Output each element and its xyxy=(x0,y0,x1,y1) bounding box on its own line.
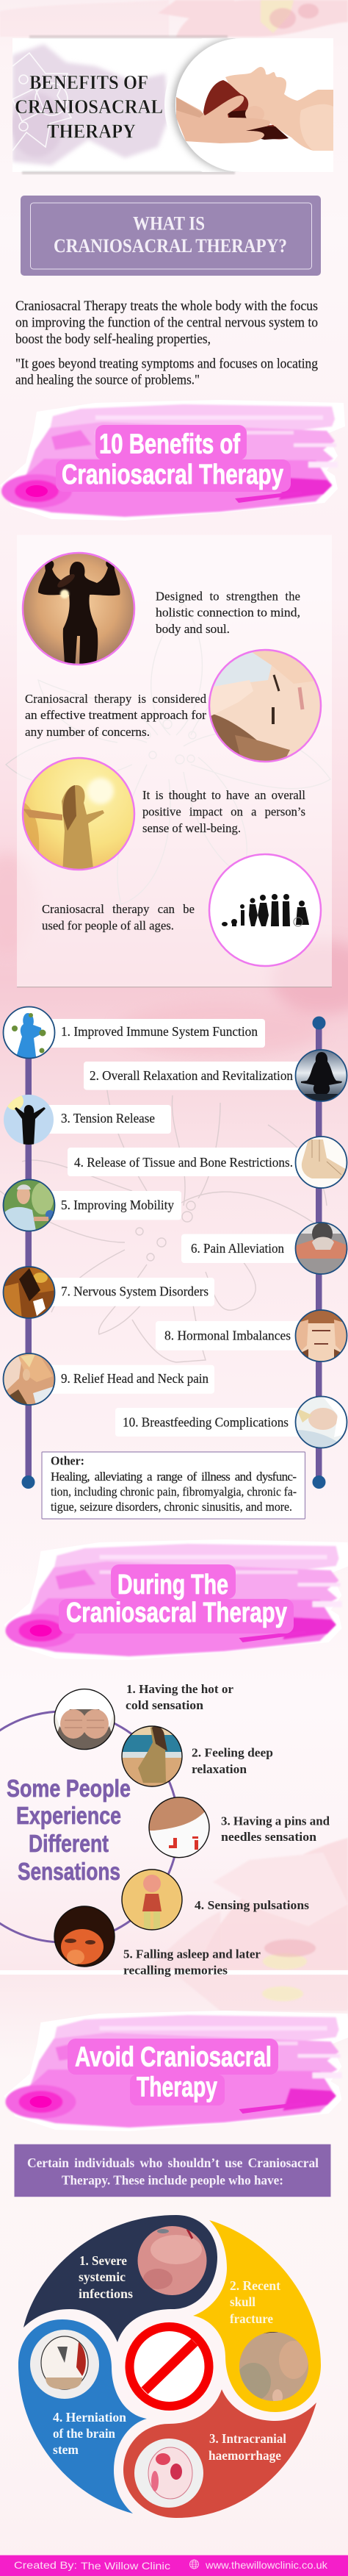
benefit 1: 1. Improved Immune System Function xyxy=(61,1024,258,1039)
header title: CRANIOSACRAL xyxy=(15,96,163,118)
flower outline behind panel xyxy=(6,603,330,904)
panel: benefits intro xyxy=(17,535,332,987)
benefit 4 xyxy=(68,1137,348,1188)
banner heading: Craniosacral Therapy xyxy=(66,1598,287,1628)
big sensations heading: Some People xyxy=(7,1775,131,1802)
banner heading: Avoid Craniosacral xyxy=(75,2042,272,2073)
sensation 1 label: 1. Having the hot or xyxy=(126,1682,233,1696)
footer xyxy=(0,2555,348,2576)
benefit 3 xyxy=(4,1092,171,1147)
icon: globe xyxy=(189,2560,198,2569)
text: effective treatment: an effective treatment approach for xyxy=(25,708,207,722)
what is heading: CRANIOSACRAL THERAPY? xyxy=(54,235,287,257)
benefit 1 xyxy=(3,1007,265,1062)
timeline lines xyxy=(22,1016,326,1489)
text: holistic xyxy=(156,589,300,636)
benefit 10: 10. Breastfeeding Complications xyxy=(123,1415,289,1430)
text: all ages: Craniosacral therapy can be xyxy=(42,902,195,916)
banner: avoid xyxy=(4,2011,348,2131)
benefit 2: 2. Overall Relaxation and Revitalization xyxy=(90,1068,293,1083)
photo: woman in sunlight xyxy=(23,758,134,875)
banner: during the therapy xyxy=(4,1539,348,1660)
sensation 5 label: recalling memories xyxy=(123,1964,228,1978)
benefit 9 xyxy=(3,1353,214,1408)
swirl: recent skull fracture: 2. Recent xyxy=(230,2278,280,2293)
sensation 2 label: relaxation xyxy=(192,1762,247,1776)
swirl: intracranial haemorrhage: haemorrhage xyxy=(209,2448,281,2463)
sensation 3 label: 3. Having a pins and xyxy=(221,1814,330,1828)
swirl: severe systemic infections: systemic xyxy=(79,2269,126,2284)
intro text: "It goes beyond treating symptoms and focuses on locating xyxy=(15,357,318,372)
sensation 1 xyxy=(54,1689,115,1750)
text: holistic: holistic connection to mind, xyxy=(156,606,300,620)
big sensations heading: Different xyxy=(29,1830,109,1857)
swirl: severe systemic infections: infections xyxy=(79,2286,133,2301)
intro text: Craniosacral Therapy treats the whole body with the focus xyxy=(15,299,318,314)
arc xyxy=(164,38,235,172)
other box: tion, including chronic pain, fibromyalgia, chronic fa- xyxy=(51,1484,297,1498)
text: effective treatment: any number of concerns. xyxy=(25,725,150,739)
sensation 5 xyxy=(54,1906,115,1967)
intro text: and healing the source of problems." xyxy=(15,373,200,388)
sensation 2 label xyxy=(192,1746,273,1776)
benefit 3: 3. Tension Release xyxy=(61,1111,155,1126)
sensation 4 label: 4. Sensing pulsations xyxy=(195,1898,310,1912)
swirl: intracranial haemorrhage: 3. Intracranial xyxy=(209,2431,286,2446)
intro text: boost the body self-healing properties, xyxy=(15,332,211,347)
swirl: severe systemic infections: 1. Severe xyxy=(79,2253,127,2268)
swirl: herniation of the brain stem xyxy=(18,2319,147,2514)
text: all ages: used for people of all ages. xyxy=(42,919,174,932)
benefit 6: 6. Pain Alleviation xyxy=(191,1241,284,1256)
banner heading xyxy=(66,1570,287,1628)
benefit 5: 5. Improving Mobility xyxy=(61,1198,174,1212)
swirl: severe systemic infections xyxy=(23,2215,217,2342)
text: effective treatment: Craniosacral therapy is considered xyxy=(25,692,207,706)
benefit 7 xyxy=(3,1267,214,1320)
photo: silhouette xyxy=(23,553,134,669)
banner heading xyxy=(75,2042,272,2103)
swirl: herniation of the brain stem: stem xyxy=(53,2442,79,2457)
swirl: recent skull fracture: skull xyxy=(230,2294,255,2309)
benefit 2 xyxy=(84,1050,348,1103)
intro text: on improving the function of the central nervous system to xyxy=(15,316,318,331)
sensation 4 xyxy=(122,1870,182,1930)
benefit 9: 9. Relief Head and Neck pain xyxy=(61,1371,209,1386)
swirl: herniation of the brain stem: 4. Herniation xyxy=(53,2410,126,2425)
what is heading xyxy=(54,213,287,257)
text: holistic: body and soul. xyxy=(156,622,230,636)
sensation 3 xyxy=(149,1797,209,1858)
photo: face massage xyxy=(209,650,323,765)
benefit 4: 4. Release of Tissue and Bone Restrictions. xyxy=(74,1155,293,1170)
text: well-being xyxy=(142,788,305,835)
text: effective treatment xyxy=(25,692,207,739)
benefit 10 xyxy=(115,1397,347,1452)
therapy photo xyxy=(176,67,333,151)
avoid intro box: Certain individuals who shouldn’t use Craniosacral xyxy=(27,2155,319,2170)
other box: Other: xyxy=(51,1454,84,1468)
header card xyxy=(12,35,333,175)
watercolor wash xyxy=(10,44,169,165)
banner heading: Craniosacral Therapy xyxy=(62,459,283,490)
icon: prohibition sign xyxy=(129,2327,209,2406)
header title xyxy=(15,71,163,143)
what is box xyxy=(21,196,321,276)
benefit 6 xyxy=(181,1220,348,1274)
flower outline behind list xyxy=(0,1084,348,1362)
sensation 3 label: needles sensation xyxy=(221,1830,316,1844)
big sensations heading xyxy=(7,1775,131,1885)
header title: BENEFITS OF xyxy=(29,71,148,93)
benefit 8 xyxy=(156,1308,348,1364)
sensation ring xyxy=(0,1711,178,1942)
sensation 1 label xyxy=(126,1682,233,1712)
banner heading: During The xyxy=(117,1570,228,1600)
benefit 8: 8. Hormonal Imbalances xyxy=(164,1328,291,1343)
footer: The Willow Clinic xyxy=(81,2560,170,2572)
sensation 1 label: cold sensation xyxy=(126,1698,203,1712)
text: holistic: Designed to strengthen the xyxy=(156,589,300,603)
text: all ages xyxy=(42,902,195,932)
big sensations heading: Sensations xyxy=(18,1858,120,1885)
banner: 10 benefits xyxy=(0,400,345,520)
text: well-being: It is thought to have an overall xyxy=(142,788,305,802)
photo: ages of life xyxy=(209,854,321,966)
big sensations heading: Experience xyxy=(16,1802,121,1829)
banner heading: 10 Benefits of xyxy=(99,429,240,460)
mandala xyxy=(12,53,71,151)
banner heading: Therapy xyxy=(137,2072,217,2103)
header title: THERAPY xyxy=(47,121,136,143)
footer: www.thewillowclinic.co.uk xyxy=(205,2559,328,2571)
other box: tigue, seizure disorders, chronic sinusitis, and more. xyxy=(51,1500,292,1514)
swirl: recent skull fracture: fracture xyxy=(230,2311,273,2326)
avoid intro box xyxy=(15,2144,330,2197)
swirl: recent skull fracture xyxy=(193,2220,321,2412)
swirl: intracranial haemorrhage xyxy=(123,2389,316,2518)
sensation 5 label: 5. Falling asleep and later xyxy=(123,1947,261,1961)
text: well-being: sense of well-being. xyxy=(142,821,241,835)
intro text xyxy=(15,299,318,388)
what is heading: WHAT IS xyxy=(133,213,205,234)
other box xyxy=(42,1452,305,1519)
sensation 5 label xyxy=(123,1947,261,1978)
sensation 3 label xyxy=(221,1814,330,1844)
footer: Created By: xyxy=(14,2559,77,2571)
avoid intro box: Therapy. These include people who have: xyxy=(62,2173,283,2188)
other box: Healing, alleviating a range of illness and dysfunc- xyxy=(51,1470,297,1484)
sensation 2 label: 2. Feeling deep xyxy=(192,1746,273,1760)
benefit 7: 7. Nervous System Disorders xyxy=(61,1284,209,1299)
sensation 2 xyxy=(122,1726,182,1786)
text: well-being: positive impact on a person’s xyxy=(142,805,305,819)
swirl: herniation of the brain stem: of the brain xyxy=(53,2426,115,2441)
banner heading xyxy=(62,429,283,490)
benefit 5 xyxy=(3,1179,181,1235)
